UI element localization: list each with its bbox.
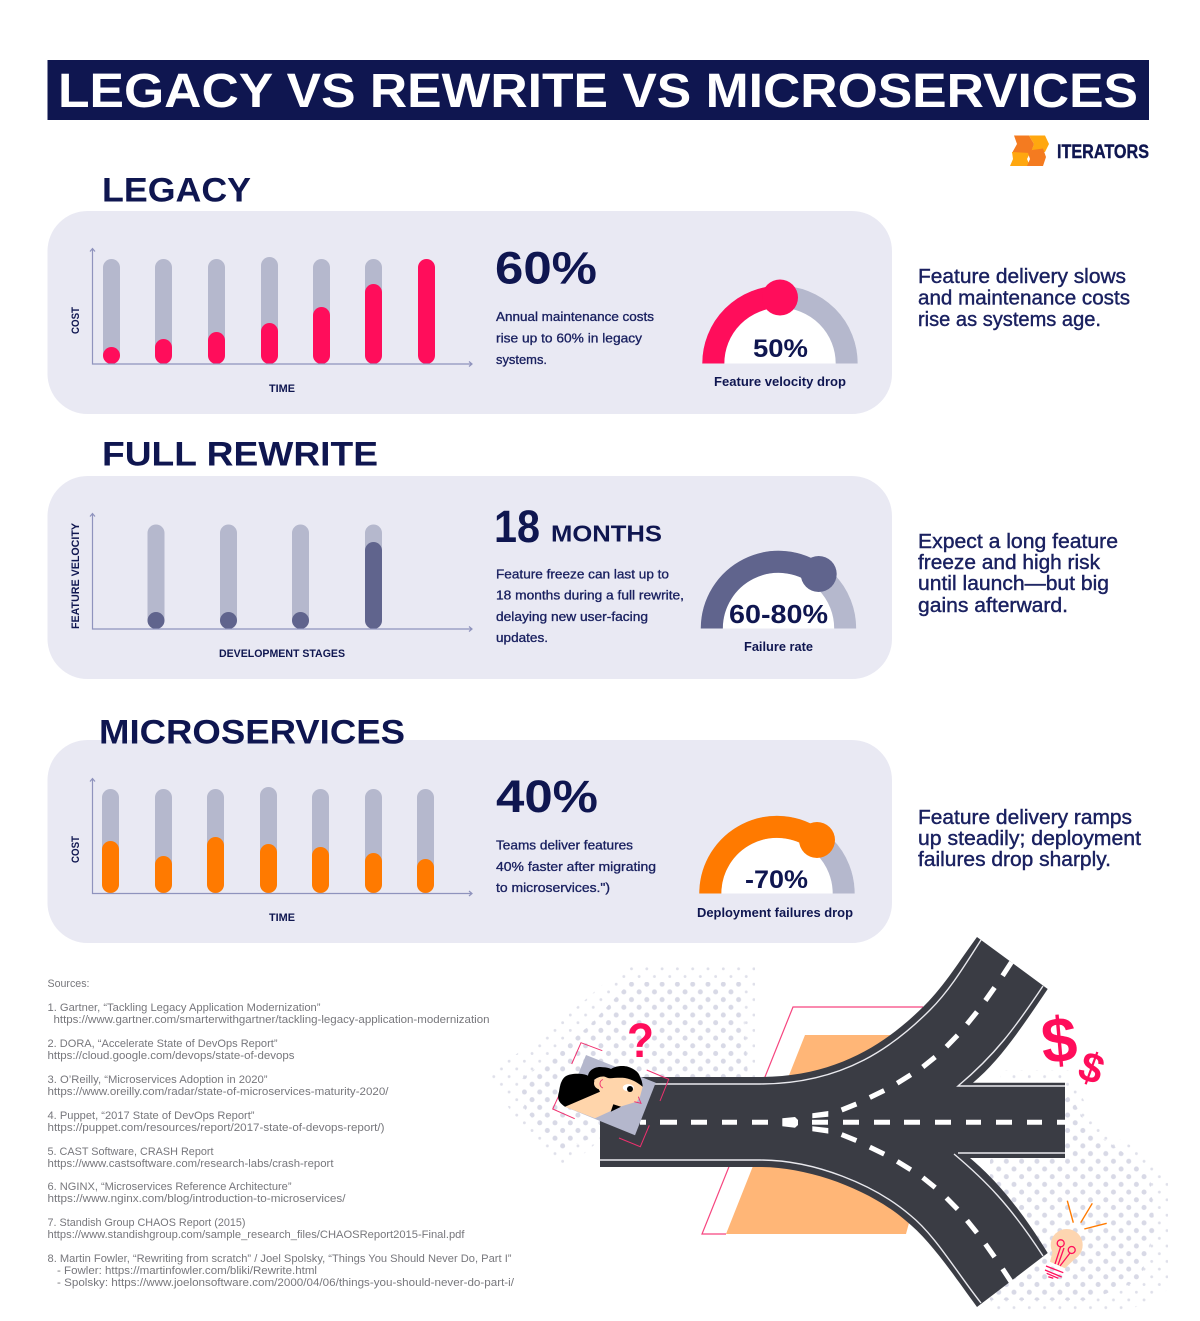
heading: Microservices: MICROSERVICES: [99, 714, 405, 752]
text: rewrite description: 18 months during a full rewrite,: [496, 588, 684, 602]
text: sources: [48, 978, 514, 1289]
text: rewrite description: Feature freeze can last up to: [496, 568, 669, 582]
text: sources: 8. Martin Fowler, “Rewriting from scratch” / Joel Spolsky, “Things You Should Never Do, Part I”: [48, 1253, 512, 1265]
illustration: road fork with person, money and lightbulb: [488, 937, 1168, 1310]
text: legacy takeaway: [918, 266, 1130, 331]
text: rewrite takeaway: Expect a long feature: [918, 531, 1118, 553]
text: sources: https://puppet.com/resources/report/2017-state-of-devops-report/): [48, 1122, 384, 1134]
icon: question mark: ?: [627, 1015, 654, 1068]
text: microservices description: to microservices."): [496, 881, 610, 895]
text: microservices takeaway: failures drop sharply.: [918, 849, 1111, 871]
text: legacy takeaway: and maintenance costs: [918, 288, 1130, 310]
bar chart: microservices cost over time: COST: [70, 836, 82, 863]
text: sources: 4. Puppet, “2017 State of DevOps Report”: [48, 1110, 255, 1122]
stat: 18 months: MONTHS: [551, 520, 662, 546]
icon: lightbulb: [1045, 1201, 1107, 1278]
heading: Full rewrite: FULL REWRITE: [102, 436, 378, 474]
text: sources: - Spolsky: https://www.joelonsoftware.com/2000/04/06/things-you-should-never-do-part-i/: [57, 1277, 514, 1289]
text: sources: 5. CAST Software, CRASH Report: [48, 1146, 214, 1158]
text: sources: https://www.standishgroup.com/sample_research_files/CHAOSReport2015-Final.pdf: [48, 1229, 466, 1241]
text: sources: 3. O’Reilly, “Microservices Adoption in 2020”: [48, 1074, 268, 1086]
icon: large dollar sign: $: [1038, 1003, 1080, 1077]
text: sources: https://www.gartner.com/smarterwithgartner/tackling-legacy-application-modernization: [54, 1014, 489, 1026]
bar chart: legacy cost over time: COST: [70, 307, 82, 334]
person portrait: [553, 1043, 669, 1147]
text: legacy description: Annual maintenance costs: [496, 310, 654, 324]
title banner: LEGACY VS REWRITE VS MICROSERVICES: [58, 64, 1138, 118]
text: legacy takeaway: Feature delivery slows: [918, 266, 1126, 288]
gauge: feature velocity drop: 50%: [753, 335, 808, 363]
logo: Iterators: ITERATORS: [1057, 142, 1149, 163]
icon: small dollar sign: $: [1073, 1042, 1111, 1094]
bar chart: legacy cost over time: [70, 248, 472, 395]
bar chart: microservices cost over time: TIME: [269, 912, 295, 924]
text: rewrite description: updates.: [496, 631, 548, 645]
text: microservices takeaway: up steadily; deployment: [918, 828, 1141, 850]
text: sources: https://www.oreilly.com/radar/state-of-microservices-maturity-2020/: [48, 1086, 388, 1098]
text: legacy description: systems.: [496, 353, 547, 367]
text: sources: https://cloud.google.com/devops/state-of-devops: [48, 1050, 295, 1062]
text: sources: 7. Standish Group CHAOS Report (2015): [48, 1217, 246, 1229]
text: microservices description: 40% faster after migrating: [496, 860, 656, 874]
halftone dots: upper left: [488, 965, 755, 1170]
text: microservices description: [496, 838, 656, 895]
text: sources: - Fowler: https://martinfowler.com/bliki/Rewrite.html: [57, 1265, 317, 1277]
logo: Iterators: [1010, 136, 1149, 166]
text: sources: https://www.nginx.com/blog/introduction-to-microservices/: [48, 1193, 346, 1205]
text: rewrite takeaway: [918, 531, 1118, 617]
stat: 60%: 60%: [495, 242, 597, 294]
gauge: deployment failures drop: Deployment failures drop: [697, 906, 853, 920]
text: sources: 1. Gartner, “Tackling Legacy Application Modernization”: [48, 1002, 321, 1014]
road lane markings: [640, 962, 1065, 1282]
pink outline parallelogram: [702, 1007, 923, 1234]
gauge: deployment failures drop: -70%: [745, 866, 808, 894]
gauge: failure rate: Failure rate: [744, 640, 813, 654]
gauge: deployment failures drop: [697, 816, 855, 920]
text: sources: Sources:: [48, 978, 90, 990]
text: sources: https://www.castsoftware.com/research-labs/crash-report: [48, 1158, 334, 1170]
road: [600, 937, 1065, 1307]
text: sources: 6. NGINX, “Microservices Reference Architecture”: [48, 1181, 292, 1193]
stat: 18 months: 18: [494, 501, 540, 552]
bar chart: feature velocity over development stages: DEVELOPMENT STAGES: [219, 648, 345, 660]
text: rewrite takeaway: gains afterward.: [918, 595, 1068, 617]
gauge: feature velocity drop: Feature velocity drop: [714, 375, 846, 389]
bar chart: feature velocity over development stages: [70, 514, 472, 660]
bar chart: feature velocity over development stages: FEATURE VELOCITY: [70, 522, 82, 629]
text: legacy takeaway: rise as systems age.: [918, 309, 1101, 331]
text: rewrite description: [496, 568, 684, 645]
panel: microservices: [48, 740, 892, 943]
bar chart: legacy cost over time: TIME: [269, 383, 295, 395]
gauge: failure rate: [701, 551, 856, 654]
text: rewrite description: delaying new user-facing: [496, 610, 648, 624]
bar chart: microservices cost over time: [70, 778, 472, 924]
text: microservices takeaway: [918, 807, 1141, 871]
halftone dots: lower right: [990, 1070, 1168, 1310]
peach ground shape: [726, 1035, 960, 1234]
stat: 40%: 40%: [496, 771, 598, 822]
gauge: feature velocity drop: [702, 280, 858, 389]
text: microservices description: Teams deliver features: [496, 838, 633, 852]
panel: full rewrite: [48, 476, 892, 679]
panel: legacy: [48, 211, 892, 414]
text: microservices takeaway: Feature delivery ramps: [918, 807, 1132, 829]
text: rewrite takeaway: freeze and high risk: [918, 552, 1101, 574]
text: legacy description: rise up to 60% in legacy: [496, 332, 643, 346]
heading: Legacy: LEGACY: [102, 172, 251, 210]
text: rewrite takeaway: until launch—but big: [918, 573, 1109, 595]
stat: 18 months: [494, 501, 662, 552]
text: sources: 2. DORA, “Accelerate State of DevOps Report”: [48, 1038, 278, 1050]
text: legacy description: [496, 310, 654, 367]
gauge: failure rate: 60-80%: [729, 599, 828, 629]
